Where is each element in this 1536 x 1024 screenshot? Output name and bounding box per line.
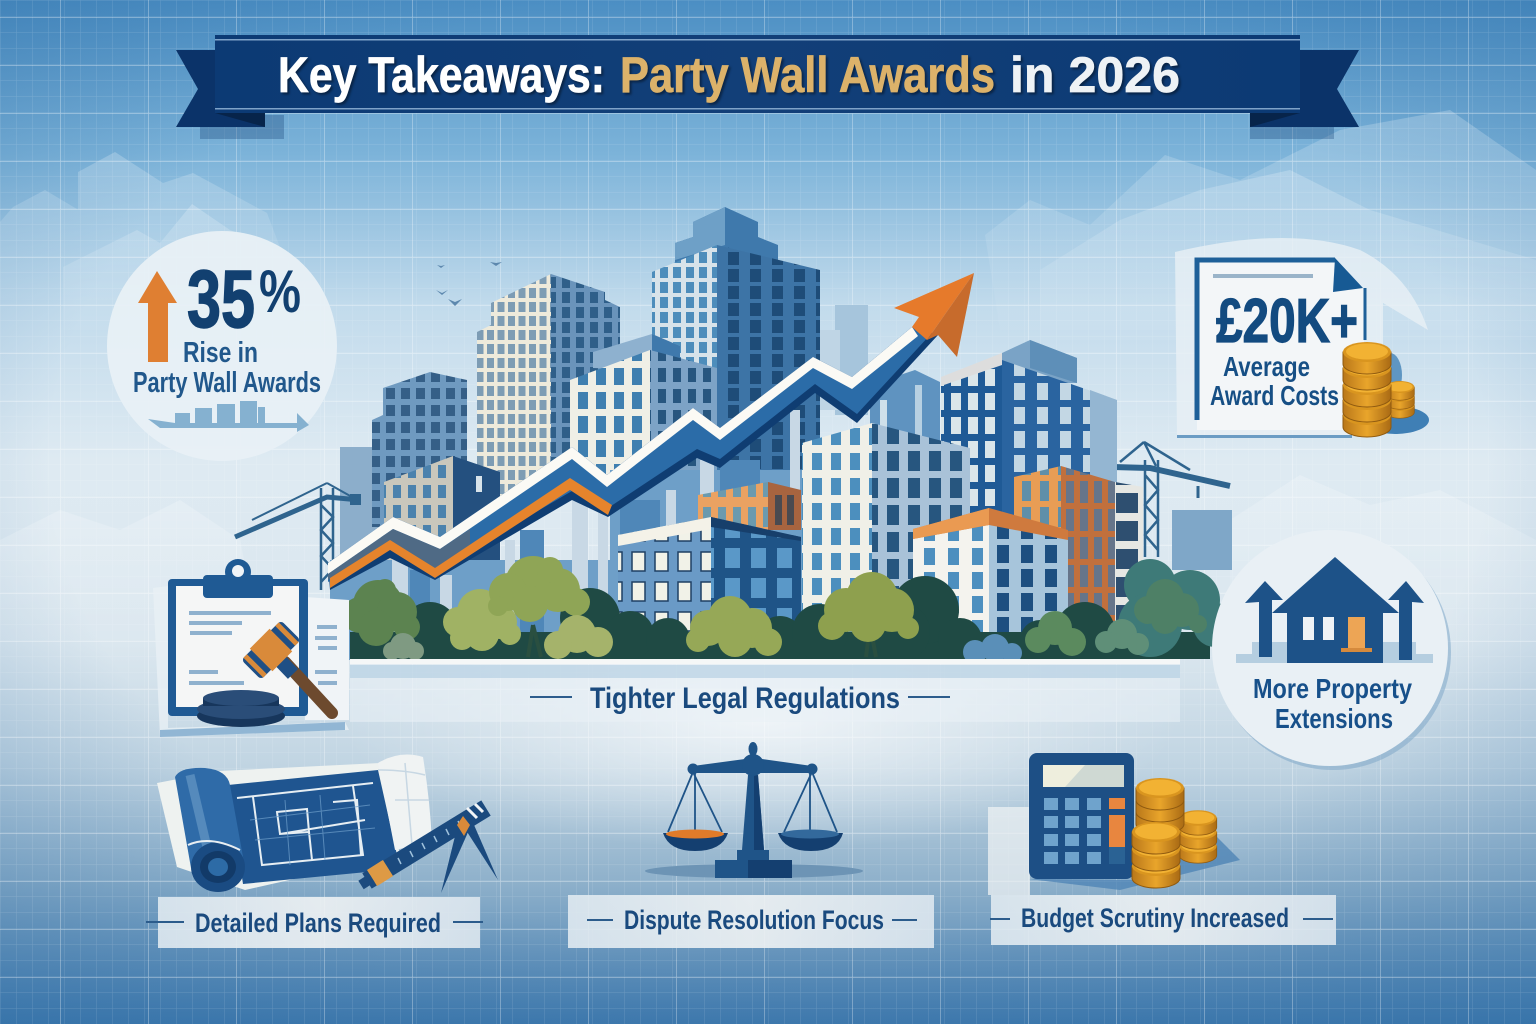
stat: 35%: % xyxy=(259,258,301,325)
plan lines xyxy=(237,783,373,865)
label: average award costs xyxy=(1210,351,1339,411)
building: white front block xyxy=(913,508,1068,650)
title text xyxy=(278,47,1180,103)
cityscape illustration xyxy=(235,207,1237,664)
panel: £20K+ average award costs xyxy=(1175,238,1429,438)
building: orange tower xyxy=(1014,466,1143,625)
crane: left xyxy=(235,483,361,590)
building: left low block xyxy=(384,456,500,560)
label: more property extensions xyxy=(1253,673,1412,734)
label: average award costs: Award Costs xyxy=(1210,380,1339,411)
ruler xyxy=(367,808,486,881)
glass reflections below arrow xyxy=(330,410,870,660)
title text: Party Wall Awards xyxy=(620,47,995,103)
card: budget scrutiny increased xyxy=(990,895,1336,945)
gavel block xyxy=(197,705,285,727)
coin shadow xyxy=(1361,406,1429,434)
icon: clipboard and gavel xyxy=(153,559,349,737)
building: navy front block xyxy=(618,517,801,650)
icon: scales of justice xyxy=(645,742,863,878)
building: tall tower xyxy=(652,207,820,470)
label: detailed plans required: Detailed Plans Required xyxy=(195,908,441,938)
icon: house with arrows xyxy=(1236,557,1433,663)
panel: more property extensions xyxy=(1212,530,1451,770)
arrowhead xyxy=(894,273,974,340)
building: left back tower xyxy=(372,372,467,527)
label: budget scrutiny increased: Budget Scrutiny Increased xyxy=(1021,903,1289,933)
trees xyxy=(342,556,1237,664)
building: small orange block xyxy=(698,482,801,530)
faded background buildings xyxy=(340,305,1232,587)
icon: blueprint and tools xyxy=(157,755,498,893)
stat: £20K+: £20K+ xyxy=(1216,287,1358,356)
icon: coins xyxy=(1343,342,1414,437)
rising trend arrow xyxy=(328,273,974,590)
clip xyxy=(203,559,273,598)
label: average award costs: Average xyxy=(1223,351,1310,382)
gavel xyxy=(285,662,332,713)
title text: Key Takeaways: xyxy=(278,47,605,103)
card: dispute resolution focus xyxy=(568,895,934,948)
label: dispute resolution focus: Dispute Resolution Focus xyxy=(624,905,884,935)
coins xyxy=(1179,838,1217,863)
title banner xyxy=(176,35,1359,139)
label: more property extensions: Extensions xyxy=(1275,703,1393,734)
title text: in 2026 xyxy=(1010,47,1180,103)
compass xyxy=(441,824,469,893)
icon: calculator and coins xyxy=(988,753,1240,895)
label: rise in party wall awards xyxy=(133,337,321,399)
card: detailed plans required xyxy=(146,897,483,948)
building: white block xyxy=(802,423,970,625)
label: rise in party wall awards: Party Wall Awards xyxy=(133,367,321,399)
building: cream tower xyxy=(477,274,620,500)
building: right blue tower xyxy=(941,340,1117,520)
crane: right xyxy=(1113,442,1230,557)
label: rise in party wall awards: Rise in xyxy=(183,337,258,369)
document xyxy=(1197,260,1364,430)
heading: tighter legal regulations: Tighter Legal Regulations xyxy=(590,682,900,715)
band: tighter legal regulations xyxy=(350,659,1180,722)
panel: 35% rise xyxy=(107,231,337,461)
stat: 35%: 35 xyxy=(187,254,255,345)
icon: up arrow xyxy=(138,271,177,362)
label: more property extensions: More Property xyxy=(1253,673,1412,704)
birds xyxy=(436,262,502,306)
building: centre block xyxy=(570,334,717,490)
mini bar chart xyxy=(148,401,309,432)
